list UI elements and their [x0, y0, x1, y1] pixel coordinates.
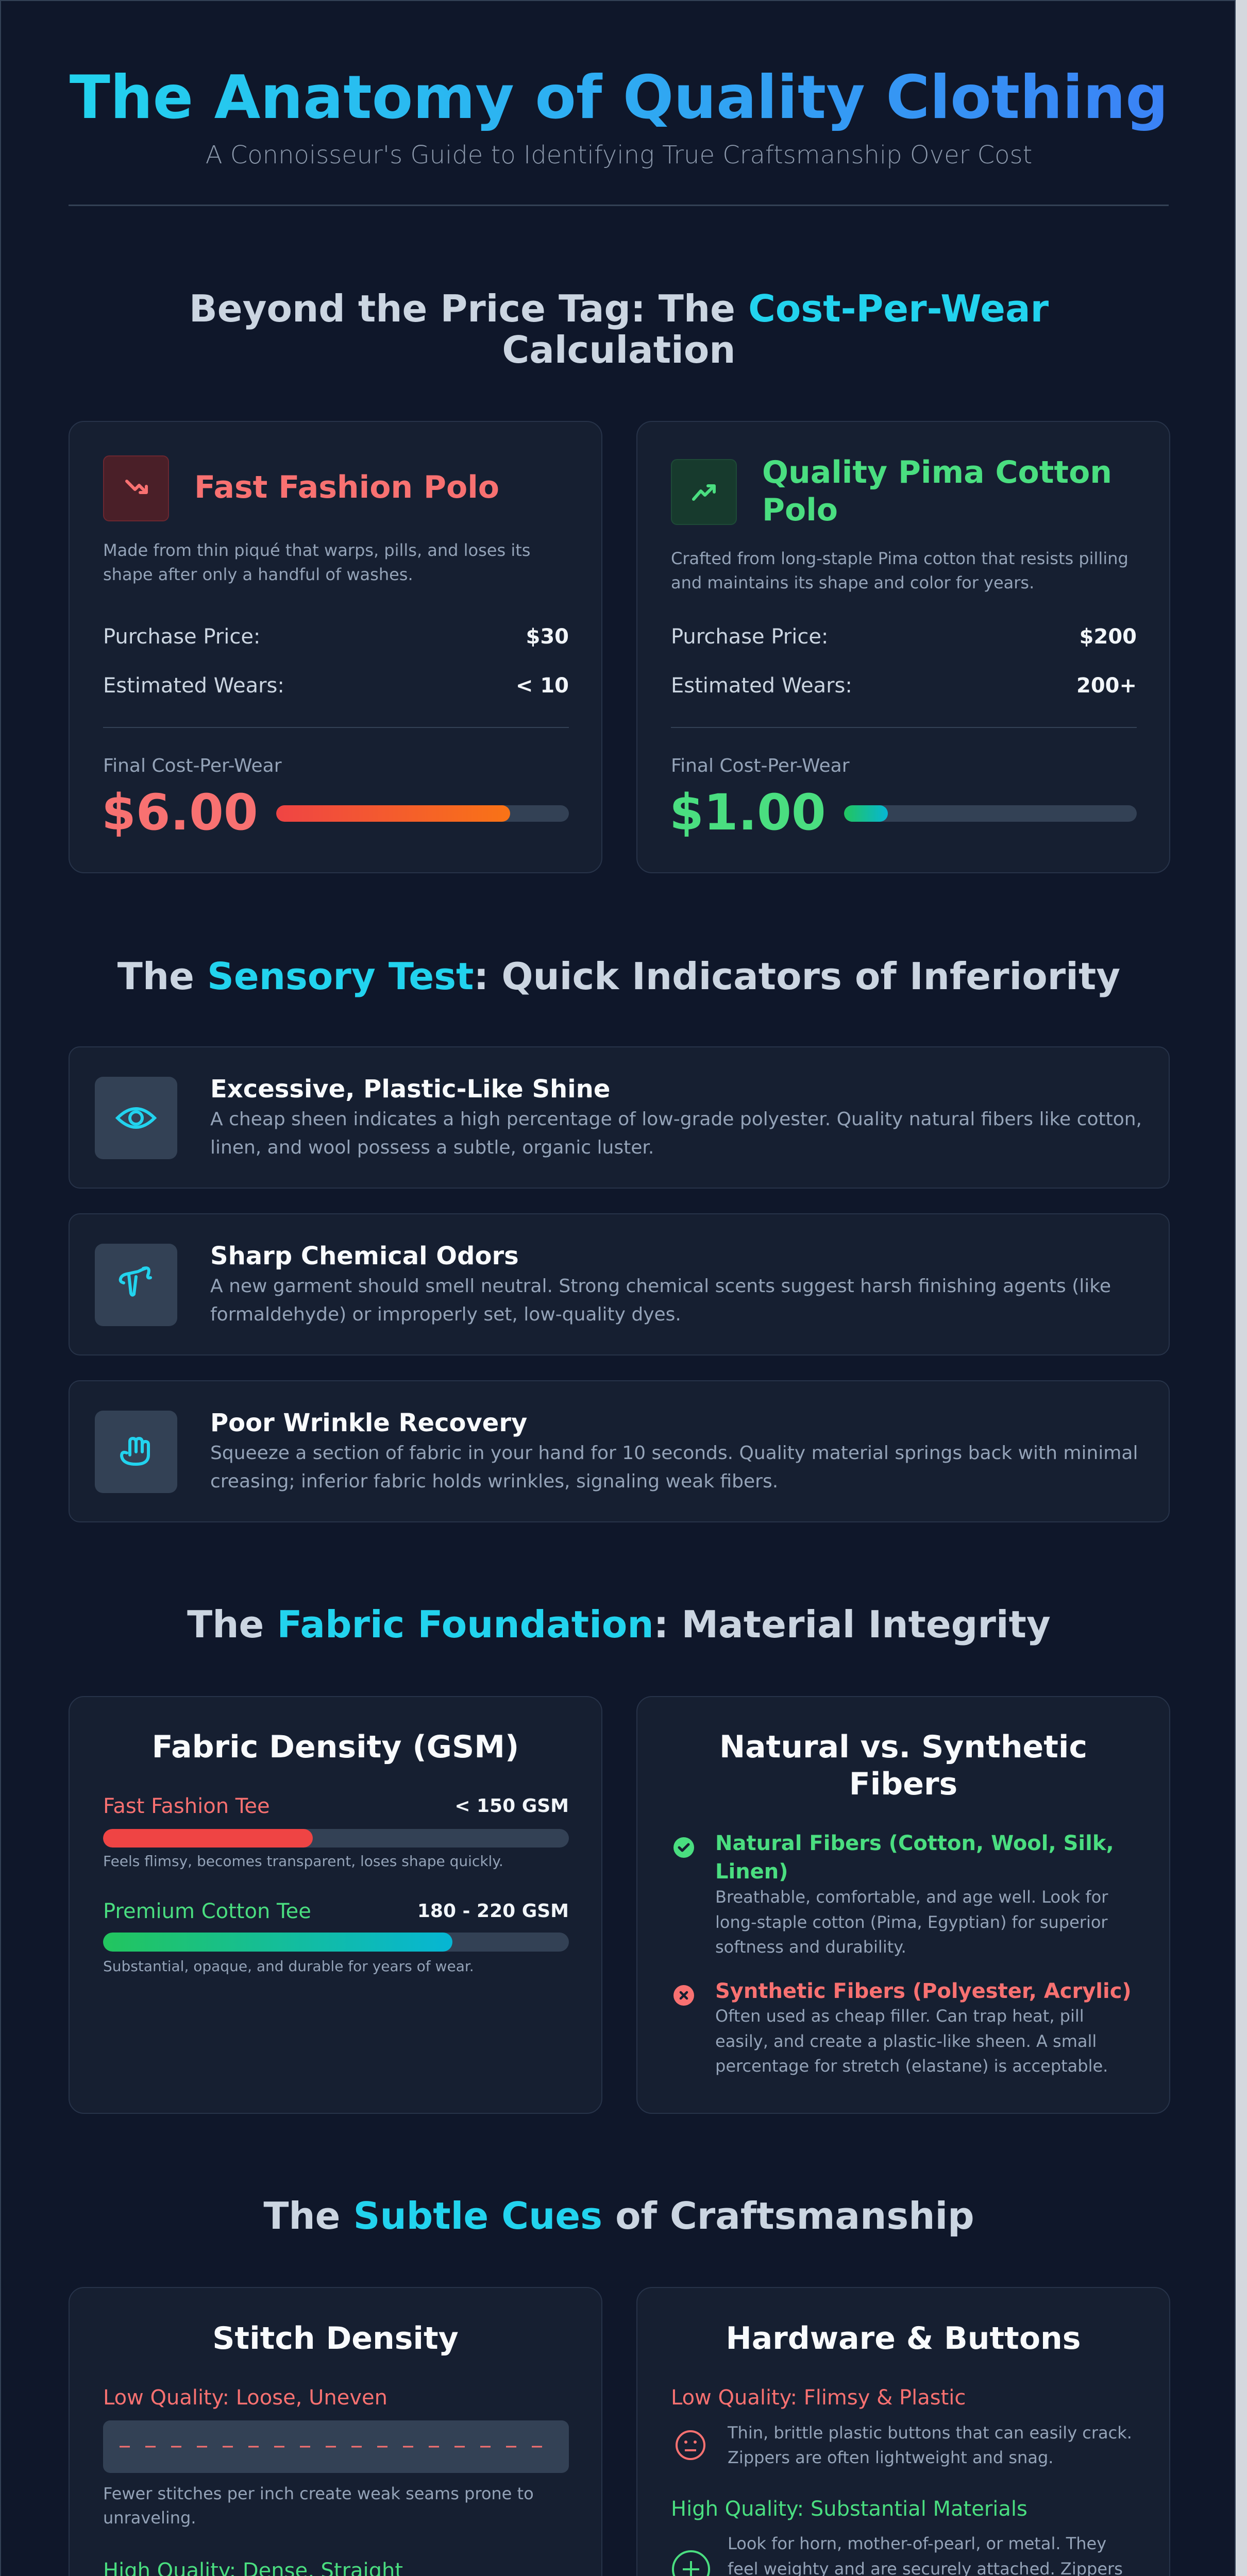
note: Substantial, opaque, and durable for years of wear.	[103, 1958, 474, 1975]
natural fibers text: long-staple cotton (Pima, Egyptian) for superior	[715, 1912, 1108, 1932]
final cost label: Final Cost-Per-Wear	[103, 755, 282, 776]
text: Fewer stitches per inch create weak seams prone to	[103, 2484, 534, 2503]
card title	[762, 454, 1112, 528]
icon: trending down	[103, 455, 169, 521]
low quality label: Low Quality: Loose, Uneven	[103, 2386, 387, 2410]
card title	[719, 1729, 1087, 1802]
card title: Fabric Density (GSM)	[152, 1729, 519, 1765]
row: wears: Estimated Wears:	[671, 674, 852, 698]
high quality label: High Quality: Substantial Materials	[671, 2497, 1027, 2521]
natural fibers text: softness and durability.	[715, 1937, 906, 1957]
card title: Hardware & Buttons	[726, 2320, 1081, 2357]
subtitle: A Connoisseur's Guide to Identifying True Craftsmanship Over Cost	[206, 141, 1032, 170]
natural fibers text	[715, 1832, 1114, 1957]
section heading: cost-per-wear: Calculation	[502, 328, 736, 371]
card title: Fast Fashion Polo	[194, 469, 499, 505]
row: fast fashion tee	[103, 1794, 569, 1818]
row: wears: < 10	[516, 674, 569, 698]
row: price	[103, 625, 569, 649]
synthetic fibers text: Often used as cheap filler. Can trap heat, pill	[715, 2006, 1084, 2026]
icon: x	[673, 1985, 695, 2006]
title: Excessive, Plastic-Like Shine	[210, 1075, 610, 1104]
row: price: $200	[1080, 625, 1137, 649]
text: Squeeze a section of fabric in your hand for 10 seconds. Quality material springs back with minimal	[210, 1443, 1138, 1464]
synthetic fibers text: Synthetic Fibers (Polyester, Acrylic)	[715, 1979, 1132, 2003]
text: Zippers are often lightweight and snag.	[728, 2448, 1053, 2467]
description: shape after only a handful of washes.	[103, 565, 413, 584]
bar: fast fashion	[103, 1829, 569, 1848]
row: price: Purchase Price:	[103, 625, 260, 649]
text: unraveling.	[103, 2508, 196, 2528]
description: and maintains its shape and color for years.	[671, 573, 1034, 592]
panel: natural vs synthetic	[636, 1696, 1170, 2114]
card title: Natural vs. Synthetic	[719, 1729, 1087, 1765]
row: wears: Estimated Wears:	[103, 674, 284, 698]
natural fibers text: Breathable, comfortable, and age well. Look for	[715, 1887, 1108, 1907]
icon: neutral face	[675, 2430, 706, 2461]
note: Feels flimsy, becomes transparent, loses shape quickly.	[103, 1853, 503, 1870]
synthetic fibers text: percentage for stretch (elastane) is acceptable.	[715, 2056, 1108, 2076]
synthetic fibers text: easily, and create a plastic-like sheen. A small	[715, 2031, 1097, 2050]
stitch sample: loose	[103, 2420, 569, 2473]
bar: 80%	[276, 805, 569, 822]
section heading: sensory test: The Sensory Test: Quick Indicators of Inferiority	[117, 955, 1120, 998]
natural fibers text: Natural Fibers (Cotton, Wool, Silk,	[715, 1832, 1114, 1855]
row: price	[671, 625, 1137, 649]
icon: check	[673, 1837, 694, 1858]
title: The Anatomy of Quality Clothing	[70, 63, 1168, 132]
panel: wrinkle	[69, 1380, 1170, 1522]
row: fast fashion tee: < 150 GSM	[454, 1795, 569, 1817]
row: premium tee: 180 - 220 GSM	[417, 1901, 569, 1922]
description	[103, 540, 530, 584]
bar: 15%	[844, 805, 1137, 822]
card title: Stitch Density	[212, 2320, 459, 2357]
icon: plus circle	[671, 2550, 711, 2576]
row: wears	[671, 674, 1137, 698]
low quality label: Low Quality: Flimsy & Plastic	[671, 2386, 966, 2410]
row: premium tee: Premium Cotton Tee	[103, 1900, 311, 1923]
card title: Quality Pima Cotton	[762, 454, 1112, 490]
row: price: $30	[526, 625, 569, 649]
text	[728, 2531, 1123, 2576]
section heading: subtle cues: The Subtle Cues of Craftsmanship	[263, 2194, 974, 2238]
row: fast fashion tee: Fast Fashion Tee	[103, 1794, 270, 1818]
icon: eye	[95, 1077, 177, 1159]
text: creasing; inferior fabric holds wrinkles, signaling weak fibers.	[210, 1471, 778, 1492]
value: $6.00: $6.00	[102, 784, 258, 841]
text: A new garment should smell neutral. Strong chemical scents suggest harsh finishing agents (like	[210, 1276, 1111, 1297]
panel: odors	[69, 1213, 1170, 1355]
bar: premium	[103, 1933, 569, 1952]
icon: spray	[95, 1244, 177, 1326]
text: formaldehyde) or improperly set, low-quality dyes.	[210, 1304, 681, 1325]
panel: quality pima polo	[636, 421, 1170, 873]
value: $1.00: $1.00	[669, 784, 826, 841]
final cost label: Final Cost-Per-Wear	[671, 755, 850, 776]
natural fibers text: Linen)	[715, 1860, 788, 1884]
section heading: fabric foundation: The Fabric Foundation: Material Integrity	[187, 1603, 1051, 1646]
card title: Fibers	[849, 1766, 957, 1802]
section heading: cost-per-wear	[189, 287, 1049, 371]
text	[103, 2482, 534, 2530]
text: Look for horn, mother-of-pearl, or metal. They	[728, 2534, 1106, 2553]
title: Sharp Chemical Odors	[210, 1242, 519, 1270]
icon: trending up	[671, 459, 737, 525]
text: linen, and wool possess a subtle, organic luster.	[210, 1137, 654, 1158]
text	[728, 2420, 1132, 2470]
panel: shine	[69, 1046, 1170, 1189]
panel: stitch density	[69, 2287, 602, 2576]
title: Poor Wrinkle Recovery	[210, 1409, 527, 1437]
description	[671, 549, 1128, 592]
row: wears: 200+	[1076, 674, 1137, 698]
text	[210, 1276, 1111, 1325]
row: wears	[103, 674, 569, 698]
panel: fabric density	[69, 1696, 602, 2114]
text: Thin, brittle plastic buttons that can easily crack.	[728, 2423, 1132, 2443]
card title: Polo	[762, 492, 838, 528]
text: A cheap sheen indicates a high percentage of low-grade polyester. Quality natural fibers like cotton,	[210, 1109, 1142, 1130]
row: premium tee	[103, 1900, 569, 1923]
row: price: Purchase Price:	[671, 625, 828, 649]
description: Made from thin piqué that warps, pills, and loses its	[103, 540, 530, 560]
section heading: cost-per-wear: Beyond the Price Tag: The Cost-Per-Wear	[189, 287, 1049, 330]
text	[210, 1443, 1138, 1492]
description: Crafted from long-staple Pima cotton that resists pilling	[671, 549, 1128, 568]
panel: fast fashion polo	[69, 421, 602, 873]
synthetic fibers text	[715, 1977, 1132, 2078]
icon: hand	[95, 1411, 177, 1493]
text	[210, 1109, 1142, 1158]
panel: hardware & buttons	[636, 2287, 1170, 2576]
